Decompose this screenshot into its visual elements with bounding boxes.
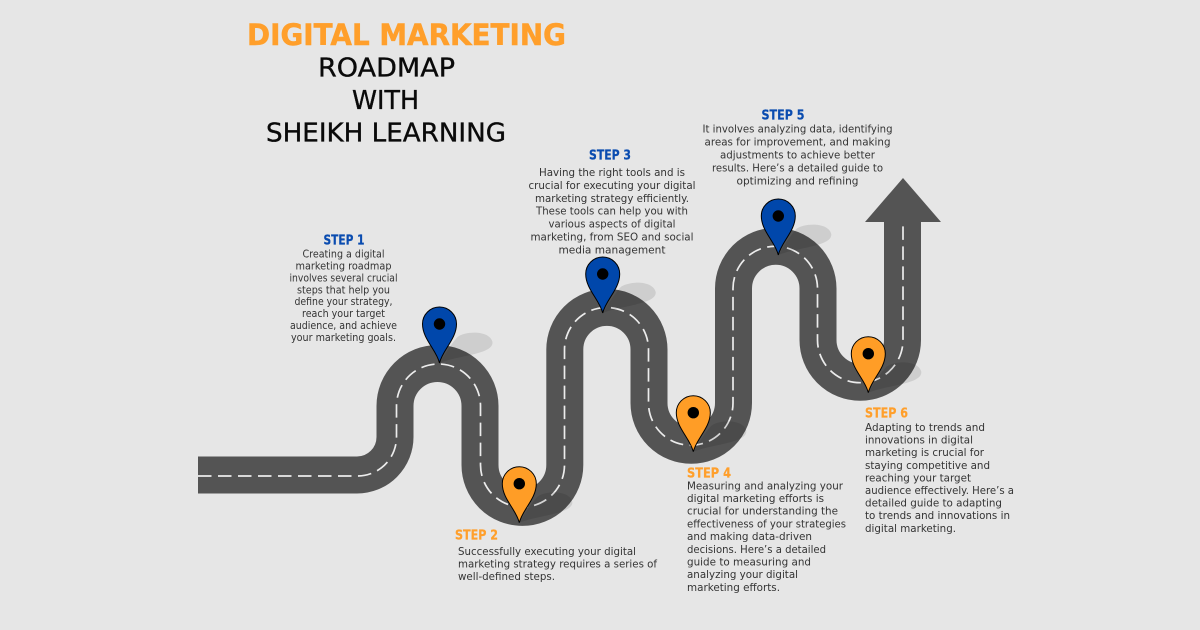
text block: step 5 [702,108,892,187]
text block: step 4: Measuring and analyzing your [687,479,844,492]
text block: step 1: steps that help you [297,283,390,296]
text block: step 6: staying competitive and [865,459,990,472]
text block: step 6: to trends and innovations in [865,509,1010,522]
text block: step 6: digital marketing. [865,522,956,535]
text block: step 1: involves several crucial [290,271,398,284]
icon: map pin step 4 [676,396,710,452]
road surface [198,220,902,507]
text block: step 4: effectiveness of your strategies [687,517,846,530]
text block: step 4: guide to measuring and [687,556,811,568]
text block: step 2: well-defined steps. [458,570,555,583]
title line: sheikh learning: SHEIKH LEARNING [266,118,506,148]
text block: step 3: various aspects of digital [548,218,676,231]
icon: map pin step 1 [422,307,456,363]
text block: step 1: define your strategy, [294,295,392,308]
text block: step 6: reaching your target [865,471,971,484]
text block: step 6: marketing is crucial for [865,446,985,459]
text block: step 4: and making data-driven [687,530,812,543]
title line: roadmap: ROADMAP [318,54,455,84]
text block: step 4: decisions. Here’s a detailed [687,543,826,556]
text block: step 6: Adapting to trends and [865,421,985,434]
heading: step 2: STEP 2 [455,528,498,544]
text block: step 1: reach your target [302,307,385,320]
road centre dashes [198,222,903,507]
text block: step 6: detailed guide to adapting [865,497,1002,510]
icon: map pin step 6 [851,337,885,393]
text block: step 6 [865,406,1014,535]
text block: step 4: marketing efforts. [687,581,780,594]
text block: step 1: Creating a digital [302,248,384,260]
arrow head [865,178,941,222]
text block: step 5: It involves analyzing data, identifying [702,123,892,136]
text block: step 2 [455,528,657,583]
text block: step 5: optimizing and refining [736,174,858,187]
text block: step 1: audience, and achieve [290,319,397,332]
text block: step 6: audience effectively. Here’s a [865,484,1014,497]
text block: step 1: marketing roadmap [296,259,392,272]
heading: step 1: STEP 1 [324,232,364,248]
text block: step 2: Successfully executing your digital [458,545,636,558]
text block: step 6: innovations in digital [865,434,973,447]
winding road with arrow [198,178,941,507]
text block: step 4: digital marketing efforts is [687,492,824,505]
text block: step 3: Having the right tools and is [539,166,685,179]
text block: step 5: areas for improvement, and making [704,136,890,149]
text block: step 3: These tools can help you with [535,205,688,218]
text block: step 4 [687,466,846,594]
title [247,18,566,148]
text block: step 3: crucial for executing your digital [528,179,696,192]
icon: map pin step 2 [502,467,536,523]
title line: digital marketing: DIGITAL MARKETING [247,18,566,52]
text block: step 2: marketing strategy requires a series of [458,558,657,570]
heading: step 4: STEP 4 [687,466,731,482]
heading: step 6: STEP 6 [865,406,908,422]
text block: step 5: results. Here’s a detailed guide to [712,161,883,174]
text block: step 1: your marketing goals. [291,331,396,344]
text block: step 4: analyzing your digital [687,568,798,581]
pin shadows [440,225,921,523]
text block: step 3: marketing strategy efficiently. [535,192,689,205]
text block: step 4: crucial for understanding the [687,505,838,518]
text block: step 5: adjustments to achieve better [720,148,876,162]
title line: with: WITH [352,86,419,116]
text block: step 3 [528,148,696,256]
text block: step 1 [290,232,398,344]
text block: step 3: marketing, from SEO and social [530,230,694,244]
text block: step 3: media management [558,244,666,256]
icon: map pin step 5 [761,199,795,255]
heading: step 3: STEP 3 [589,148,631,164]
heading: step 5: STEP 5 [762,108,804,124]
icon: map pin step 3 [586,257,620,313]
